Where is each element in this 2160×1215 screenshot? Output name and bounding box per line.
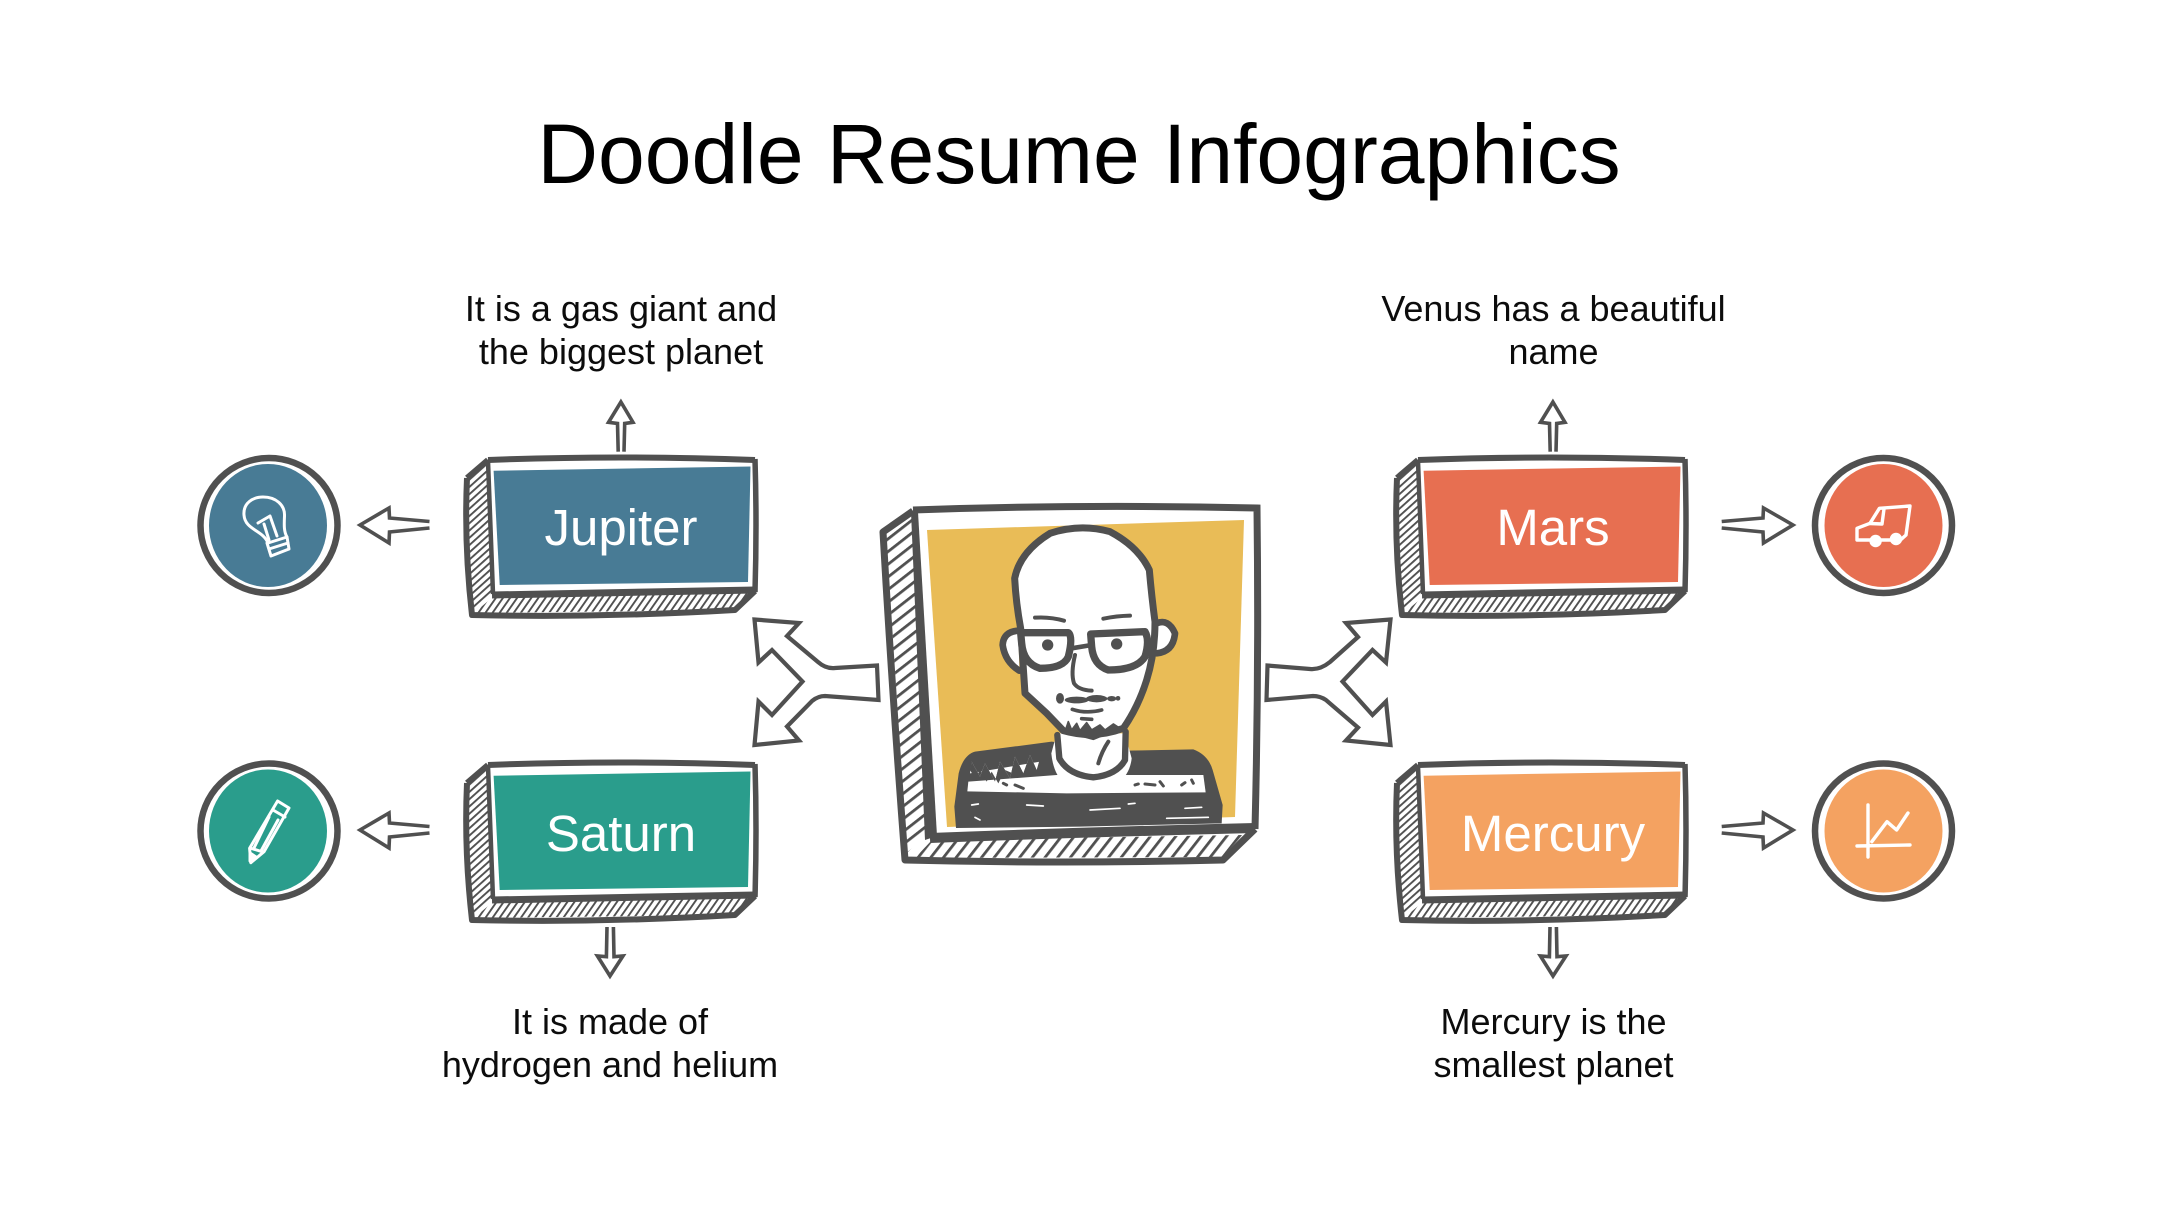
- text: Mercury description: Mercury is the: [1440, 1001, 1667, 1042]
- icon circle: bulb: [200, 458, 338, 593]
- text: Jupiter description: It is a gas giant and: [465, 288, 777, 329]
- panel: Mars box: Mars: [1496, 499, 1610, 556]
- text: Saturn description: hydrogen and helium: [442, 1044, 778, 1085]
- arrow: fork left: [754, 620, 878, 745]
- arrow: Mars up: [1540, 402, 1565, 452]
- icon: line chart: [1857, 805, 1910, 857]
- icon circle: truck: [1815, 458, 1952, 593]
- panel: Jupiter box: [466, 458, 756, 616]
- arrow: Mercury down: [1540, 927, 1566, 976]
- eyes: [1042, 639, 1053, 651]
- panel: Mars box: [1396, 458, 1686, 616]
- icon: light bulb: [244, 497, 289, 556]
- yellow background: [927, 520, 1244, 827]
- text: Mercury description: smallest planet: [1433, 1044, 1674, 1085]
- panel: Jupiter box: Jupiter: [544, 499, 698, 556]
- nose: [1073, 655, 1092, 691]
- arrow: Jupiter left: [360, 508, 430, 543]
- text: Venus description: Venus has a beautiful: [1381, 288, 1726, 329]
- arrow: Mars right: [1722, 508, 1793, 543]
- portrait: man with glasses: [954, 528, 1223, 828]
- eyebrows: [1035, 616, 1130, 621]
- head: [1015, 528, 1155, 734]
- panel: central portrait frame: [883, 506, 1258, 862]
- title: Doodle Resume Infographics: [537, 107, 1621, 201]
- panel: Saturn box: [466, 762, 756, 921]
- arrow: Saturn down: [597, 927, 623, 976]
- text: Venus description: name: [1508, 331, 1599, 372]
- icon circle: pencil: [200, 764, 338, 898]
- sweater: [954, 742, 1223, 828]
- arrow: Jupiter up: [608, 402, 633, 452]
- stubble: [1065, 722, 1120, 739]
- arrow: fork right: [1266, 620, 1390, 745]
- panel: Mercury box: Mercury: [1461, 805, 1646, 862]
- arrow: Saturn left: [360, 813, 430, 848]
- stripes detail: [1003, 780, 1193, 788]
- ears: [1003, 622, 1175, 671]
- icon: pencil: [250, 801, 289, 863]
- moustache: [1056, 693, 1120, 704]
- panel: Mercury box: [1396, 762, 1686, 921]
- arrow: Mercury right: [1722, 813, 1793, 848]
- mouth: [1072, 709, 1102, 719]
- collar and neck: [1051, 733, 1132, 792]
- glasses: [1021, 633, 1071, 668]
- icon circle: chart: [1815, 764, 1952, 898]
- panel: Saturn box: Saturn: [546, 805, 696, 862]
- text: Jupiter description: the biggest planet: [479, 331, 763, 372]
- text: Saturn description: It is made of: [512, 1001, 709, 1042]
- icon: truck: [1857, 506, 1910, 546]
